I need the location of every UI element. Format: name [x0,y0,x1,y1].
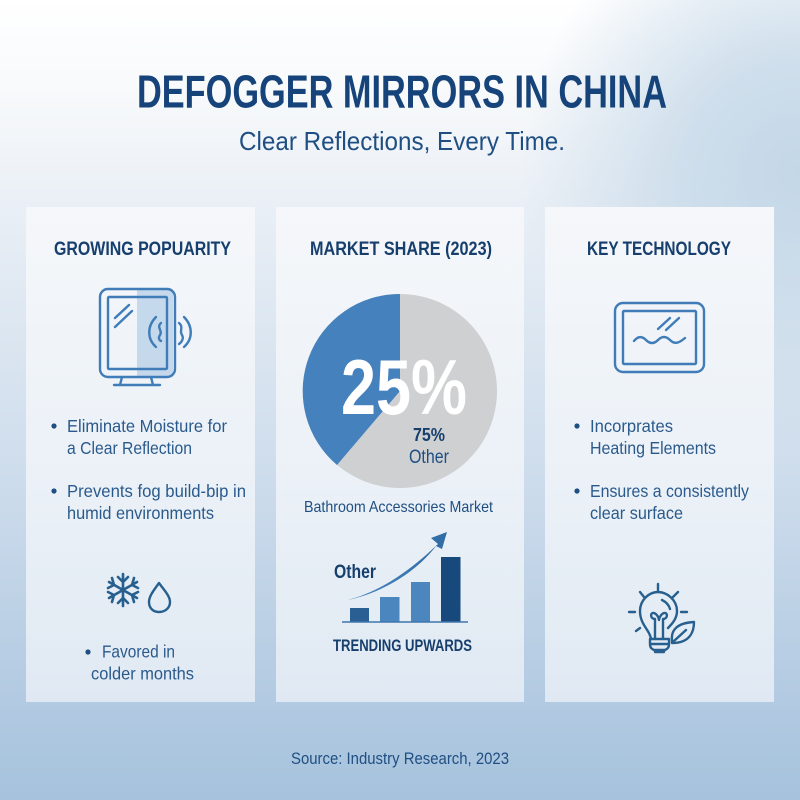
chart label: other: Other [334,562,376,583]
heading: market share: MARKET SHARE (2023) [310,239,492,260]
bullet list: heating and surface: Heating Elements [590,438,716,458]
arrow: upward trend [348,532,447,600]
bullet list: heating and surface: clear surface [590,503,683,523]
pie value: 25%: 25% [341,343,467,431]
caption: bathroom accessories market: Bathroom Accessories Market [304,499,493,516]
bullet list: moisture and fog: a Clear Reflection [67,438,192,458]
panel background: key technology [545,207,774,702]
panel background: growing popularity [26,207,255,702]
pie label: 75% other [409,425,450,468]
icon: snowflake [108,574,138,606]
bullet list: moisture and fog [51,416,246,523]
pie label: 75% other: Other [409,447,450,468]
heading: growing popularity: GROWING POPUARITY [54,239,231,260]
pie chart [303,294,497,488]
icon: heated mirror [615,303,704,372]
icon: water drop [149,583,170,612]
source note: Source: Industry Research, 2023 [291,749,509,768]
bar chart: trending upwards [334,532,468,622]
text: favored in colder months: Favored in [102,642,175,662]
text: favored in colder months: colder months [91,664,194,684]
bullet list: moisture and fog: Prevents fog build-bip in [67,481,246,501]
panel: key technology [545,207,774,702]
bullet list: heating and surface: Ensures a consistently [590,481,749,501]
panel: growing popularity [26,207,255,702]
panel background: market share [276,207,524,702]
bullet list: heating and surface [574,416,749,523]
panel: market share [276,207,524,702]
icon: mirror with fog waves [100,289,191,385]
bullet list: heating and surface: Incorprates [590,416,673,436]
subtitle: Clear Reflections, Every Time. [239,126,565,156]
caption: trending upwards: TRENDING UPWARDS [333,636,472,655]
icon: light bulb with leaf [629,584,694,652]
pie label: 75% other: 75% [413,425,445,445]
heading: key technology: KEY TECHNOLOGY [587,239,731,260]
bullet list: moisture and fog: humid environments [67,503,214,523]
bullet list: moisture and fog: Eliminate Moisture for [67,416,227,436]
text: favored in colder months [85,642,194,684]
